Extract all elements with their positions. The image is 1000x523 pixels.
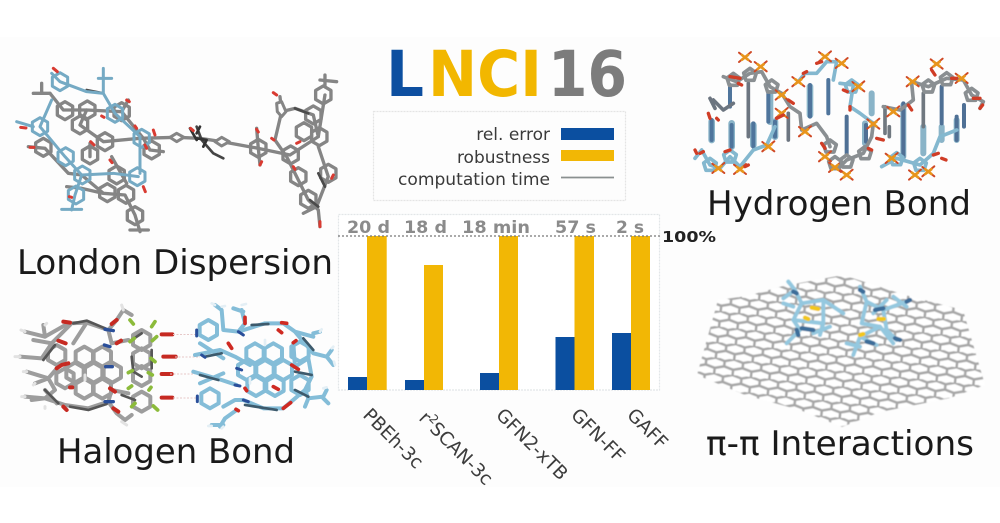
legend item: robustness bbox=[457, 148, 614, 168]
title: LNCI16 bbox=[386, 38, 627, 111]
graphene sheet bbox=[690, 270, 990, 430]
bars: GFN2-xTB bbox=[480, 236, 518, 390]
legend item: computation time: computation time bbox=[398, 170, 550, 190]
oxygen atoms bbox=[695, 62, 825, 167]
legend item: rel. error bbox=[476, 125, 614, 145]
bars: PBEh-3c bbox=[348, 236, 387, 390]
bromine and oxygen atoms bbox=[57, 320, 176, 412]
100% label: 100% bbox=[662, 228, 717, 246]
title: LNCI16: L bbox=[386, 38, 424, 111]
computation times: 18 d bbox=[404, 218, 447, 238]
molecule: London Dispersion bbox=[17, 68, 337, 232]
oxygen atoms bbox=[843, 70, 983, 160]
method labels: GAFF bbox=[622, 405, 671, 454]
molecule: Hydrogen Bond (DNA) right half bbox=[836, 58, 983, 180]
label: London Dispersion: London Dispersion bbox=[17, 243, 333, 283]
blue cage bbox=[17, 68, 149, 210]
bars: r2SCAN-3c bbox=[405, 265, 443, 390]
method labels: PBEh-3c bbox=[358, 405, 427, 473]
molecule: Halogen Bond right, blue bbox=[193, 303, 335, 428]
oxygen atoms bbox=[228, 317, 298, 411]
title: LNCI16: 16 bbox=[548, 38, 627, 111]
bars: GAFF bbox=[612, 236, 650, 390]
label: Hydrogen Bond: Hydrogen Bond bbox=[707, 184, 971, 224]
method labels bbox=[358, 405, 671, 490]
halogen contacts bbox=[170, 334, 200, 398]
backbone bbox=[695, 62, 837, 170]
dark accents bbox=[200, 324, 313, 410]
base stacks bbox=[712, 87, 810, 147]
backbone bbox=[840, 80, 957, 170]
grey sticks bbox=[20, 310, 150, 420]
computation times: 57 s bbox=[555, 218, 596, 238]
molecule: Halogen Bond left, grey bbox=[15, 305, 176, 425]
bar chart bbox=[338, 214, 717, 490]
grey framework bbox=[28, 75, 337, 232]
hydrogen tips bbox=[15, 305, 127, 425]
legend item: rel. error: rel. error bbox=[476, 125, 550, 145]
method labels: GFN2-xTB bbox=[491, 405, 572, 485]
molecule: Hydrogen Bond (DNA) left half bbox=[695, 51, 841, 174]
oxygen atoms bbox=[21, 68, 333, 227]
label: Halogen Bond: Halogen Bond bbox=[57, 432, 295, 472]
method labels: GFN-FF bbox=[566, 405, 629, 467]
computation times: 20 d bbox=[347, 218, 390, 238]
label: pi-pi Interactions: π-π Interactions bbox=[706, 424, 974, 464]
phosphate groups bbox=[836, 58, 968, 180]
phosphate groups bbox=[712, 51, 841, 174]
molecule: graphene with adsorbate bbox=[690, 270, 990, 430]
bars: GFN-FF bbox=[556, 236, 594, 390]
method labels: 2 bbox=[426, 412, 442, 427]
computation times: 18 min bbox=[462, 218, 530, 238]
adsorbed molecule bbox=[783, 282, 910, 355]
base stacks bbox=[865, 93, 957, 157]
blue sticks bbox=[193, 305, 333, 427]
computation times bbox=[347, 218, 644, 238]
title: LNCI16: NCI bbox=[428, 38, 542, 111]
fluorine atoms bbox=[128, 320, 158, 410]
method labels: r bbox=[414, 408, 435, 428]
legend bbox=[374, 112, 626, 200]
computation times: 2 s bbox=[616, 218, 644, 238]
method labels: SCAN-3c bbox=[425, 418, 497, 490]
legend item: robustness: robustness bbox=[457, 148, 550, 168]
